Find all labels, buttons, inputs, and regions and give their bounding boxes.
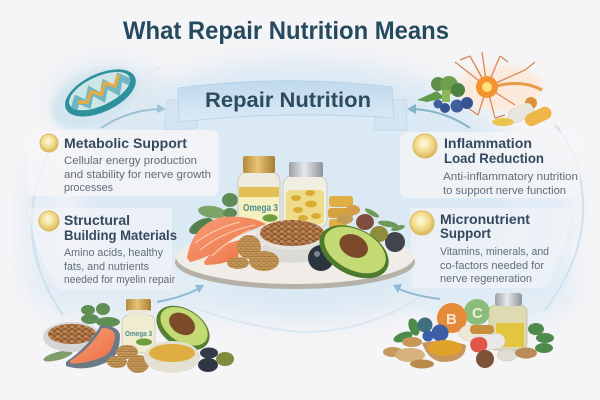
heading — [64, 213, 177, 243]
icon: gold bullet — [40, 134, 58, 152]
panel: micronutrient support — [410, 208, 572, 288]
heading: Support — [440, 226, 491, 241]
icon: mitochondrion — [50, 66, 136, 130]
banner — [164, 81, 407, 130]
lentil bowl — [256, 220, 328, 263]
panel: inflammation load reduction — [400, 132, 580, 198]
icon: gold bullet — [413, 134, 437, 158]
leaves left — [187, 193, 238, 237]
herbs — [42, 303, 120, 364]
banner label: Repair Nutrition — [205, 89, 371, 112]
salmon — [187, 217, 266, 265]
description: Vitamins, minerals, and — [440, 246, 549, 258]
walnuts — [107, 345, 149, 373]
banner ribbon — [178, 81, 394, 122]
banner tails — [164, 100, 407, 130]
nuts and spice — [383, 337, 537, 368]
capsule bowl — [144, 341, 200, 373]
description: processes — [64, 182, 113, 194]
salmon steak — [66, 326, 120, 368]
title: What Repair Nutrition Means — [123, 17, 449, 45]
heading: Building Materials — [64, 228, 177, 243]
vitamin C ball: C — [472, 305, 483, 322]
berries — [198, 348, 234, 372]
description: fats, and nutrients — [64, 261, 149, 273]
arrow: vitamins to plate — [393, 284, 440, 299]
leaves right — [364, 207, 405, 232]
panel: structural building materials — [28, 208, 177, 290]
berries — [418, 318, 448, 342]
illustration: structural foods — [42, 297, 234, 373]
icon: gold bullet — [410, 211, 434, 235]
heading — [444, 136, 544, 166]
icon: gold bullet — [39, 211, 59, 231]
description: and stability for nerve growth — [64, 169, 211, 181]
supplement jar — [489, 293, 527, 350]
heading — [440, 212, 530, 241]
capsules — [459, 325, 506, 353]
arrow: mitochondrion to banner — [101, 104, 166, 128]
heading: Metabolic Support — [64, 136, 187, 151]
description: nerve regeneration — [440, 273, 532, 285]
icon: neuron, greens and capsules — [417, 52, 554, 128]
description — [64, 155, 211, 194]
vitamin B ball — [437, 303, 467, 333]
heading: Structural — [64, 213, 130, 228]
description — [440, 246, 549, 285]
avocado — [311, 214, 398, 289]
heading: Load Reduction — [444, 151, 544, 166]
plate — [175, 230, 415, 289]
description: Cellular energy production — [64, 155, 197, 167]
capsule jar — [283, 162, 327, 228]
omega 3 bottle: Omega 3 — [125, 329, 152, 338]
description: co-factors needed for — [440, 260, 544, 272]
arrow: bottom-left food to plate — [157, 285, 204, 302]
omega 3 bottle: Omega 3 — [243, 203, 278, 214]
flax bowl — [43, 322, 101, 352]
description: needed for myelin repair — [64, 274, 175, 286]
stacked capsules — [328, 196, 360, 229]
avocado half — [148, 297, 218, 359]
description — [64, 247, 175, 286]
vitamin B ball: B — [446, 311, 457, 328]
dark berries — [308, 214, 405, 271]
vitamin C ball — [464, 299, 490, 325]
heading: Inflammation — [444, 136, 532, 151]
illustration: micronutrient foods — [383, 293, 554, 368]
omega 3 bottle — [238, 156, 280, 228]
leaves — [392, 317, 554, 353]
description: to support nerve function — [443, 185, 566, 197]
description: Amino acids, healthy — [64, 247, 163, 259]
central food plate — [175, 156, 415, 289]
description — [443, 171, 578, 197]
description: Anti-inflammatory nutrition — [443, 171, 578, 183]
walnuts — [227, 235, 279, 271]
heading: Micronutrient — [440, 212, 530, 227]
arrow: neuron to banner — [407, 104, 470, 128]
omega 3 bottle — [122, 299, 155, 353]
panel: metabolic support — [27, 130, 219, 196]
